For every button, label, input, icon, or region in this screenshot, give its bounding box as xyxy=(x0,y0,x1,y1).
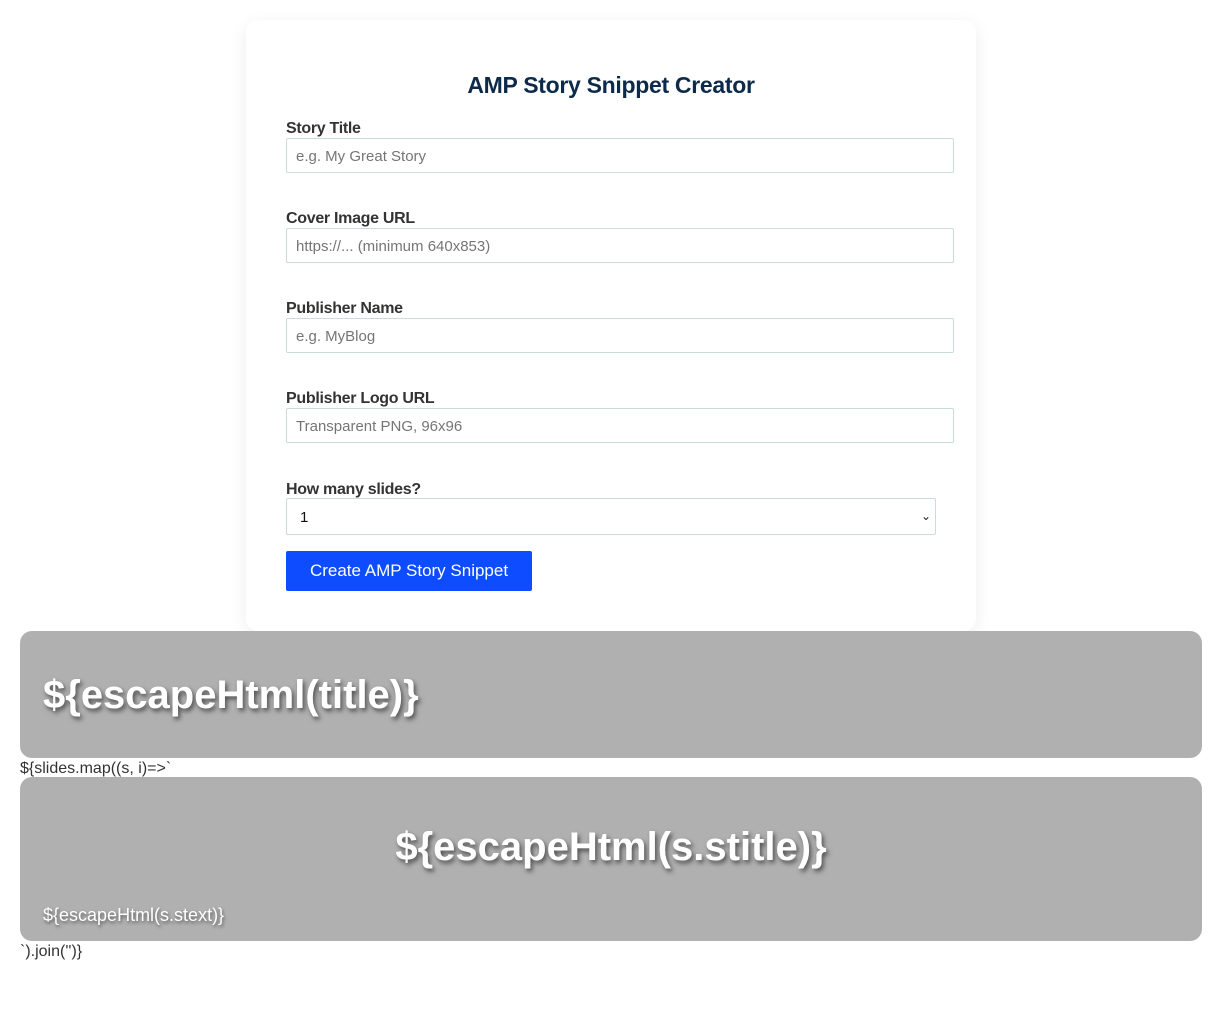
cover title: ${escapeHtml(title)} xyxy=(43,673,419,717)
input: cover image: https://... (minimum 640x853) xyxy=(296,238,490,255)
input: publisher name: e.g. MyBlog xyxy=(296,328,375,345)
text: map start: ${slides.map((s, i)=>` xyxy=(20,760,171,777)
label: slides count: How many slides? xyxy=(286,481,421,498)
slide text: ${escapeHtml(s.stext)} xyxy=(43,905,224,925)
select: slides count: 1 xyxy=(300,509,308,526)
panel: cover slide xyxy=(20,631,1202,758)
button: create snippet xyxy=(286,551,532,591)
input: publisher logo: Transparent PNG, 96x96 xyxy=(296,418,462,435)
label: publisher name: Publisher Name xyxy=(286,300,403,317)
title: AMP Story Snippet Creator xyxy=(467,72,755,98)
label: cover image: Cover Image URL xyxy=(286,210,415,227)
input: publisher name xyxy=(286,318,954,353)
panel: slide xyxy=(20,777,1202,941)
slide title: ${escapeHtml(s.stitle)} xyxy=(395,825,827,869)
select: slides count xyxy=(286,498,936,535)
text: join: `).join('')} xyxy=(20,943,82,960)
label: publisher logo: Publisher Logo URL xyxy=(286,390,434,407)
input: publisher logo xyxy=(286,408,954,443)
input: cover image xyxy=(286,228,954,263)
label: story title: Story Title xyxy=(286,120,361,137)
button: create snippet: Create AMP Story Snippet xyxy=(310,561,508,580)
input: story title: e.g. My Great Story xyxy=(296,148,426,165)
panel: form card xyxy=(246,20,976,631)
select: slides count: ⌄ xyxy=(921,509,931,523)
input: story title xyxy=(286,138,954,173)
